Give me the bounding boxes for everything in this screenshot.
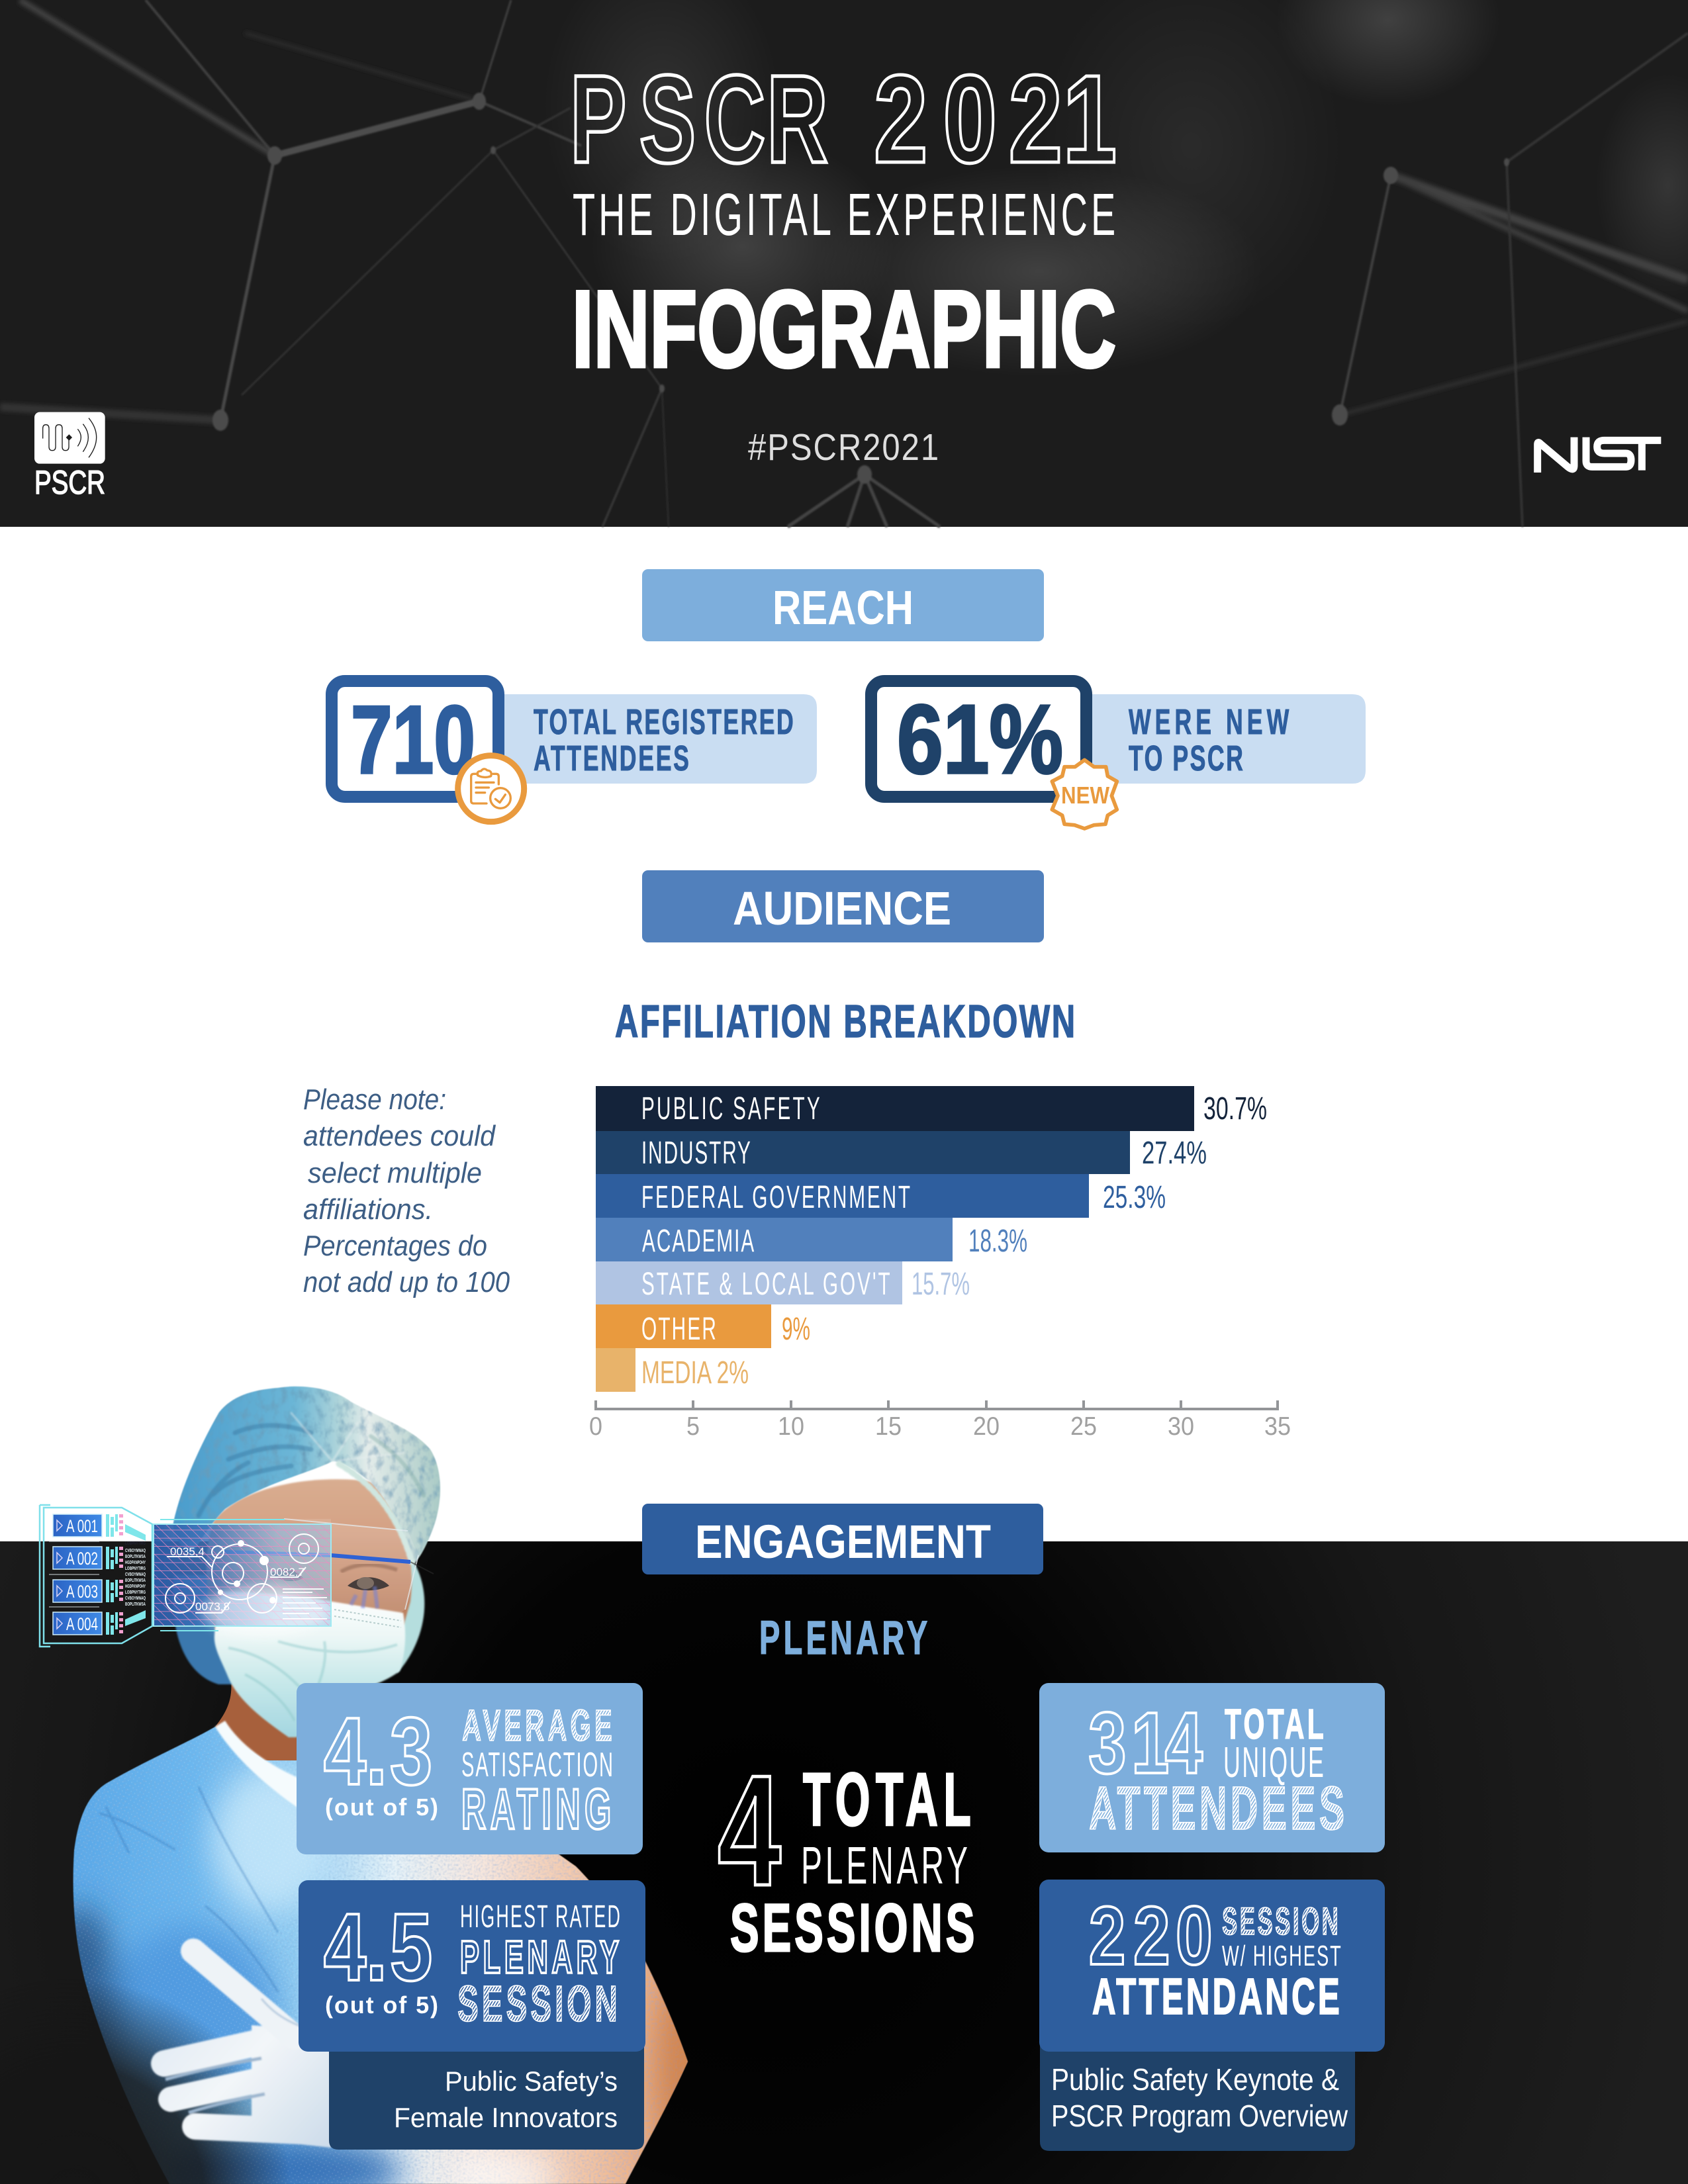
chart axis: 0 bbox=[589, 1412, 602, 1441]
title: PSCR 2021: 2021 bbox=[874, 49, 1117, 189]
eyes and face shield bbox=[223, 1519, 434, 1615]
gloved hand bbox=[164, 1951, 331, 2148]
title: infographic: INFOGRAPHIC bbox=[572, 268, 1116, 390]
bar: other bbox=[596, 1304, 810, 1348]
data panel: 0073,8 bbox=[195, 1600, 230, 1613]
bar: state and local government: STATE & LOCAL GOV'T bbox=[641, 1267, 890, 1302]
hashtag: #PSCR2021 bbox=[748, 427, 939, 469]
bar: media: MEDIA 2% bbox=[641, 1355, 749, 1390]
icon: clipboard with check bbox=[458, 756, 524, 822]
bar: public safety: PUBLIC SAFETY bbox=[641, 1091, 820, 1126]
button: A 003 bbox=[53, 1580, 123, 1602]
chart axis: 30 bbox=[1168, 1412, 1194, 1441]
chart axis bbox=[589, 1400, 1291, 1441]
stat: 4.5 highest rated plenary session: (out of 5) bbox=[325, 1991, 438, 2019]
stat: 314 total unique attendees bbox=[1039, 1683, 1385, 1852]
bar: other: OTHER bbox=[641, 1312, 716, 1347]
data panel: 0082,7 bbox=[270, 1566, 305, 1578]
bar: industry: INDUSTRY bbox=[641, 1136, 751, 1171]
stat: 4.3 average satisfaction rating: RATING bbox=[461, 1778, 611, 1841]
button: A 004 bbox=[53, 1612, 123, 1635]
panel: 61% were new to PSCR bbox=[871, 681, 1366, 829]
label: total registered attendees: ATTENDEES bbox=[534, 739, 689, 778]
button: A 001: A 001 bbox=[66, 1516, 98, 1536]
chart axis: 20 bbox=[973, 1412, 1000, 1441]
chart axis: 35 bbox=[1264, 1412, 1291, 1441]
heading: audience bbox=[642, 870, 1044, 942]
holographic display bbox=[40, 1505, 331, 1647]
neck and collar bbox=[215, 1680, 311, 1817]
button: A 002: A 002 bbox=[66, 1549, 98, 1569]
stat: 220 session with highest attendance: ATTENDANCE bbox=[1092, 1968, 1340, 2025]
stat: 4.5 highest rated plenary session: HIGHEST RATED bbox=[460, 1899, 620, 1934]
data panel bbox=[154, 1520, 331, 1637]
note: percentages disclaimer bbox=[303, 1083, 510, 1298]
chart axis: 25 bbox=[1070, 1412, 1097, 1441]
number box bbox=[332, 681, 498, 797]
stat: 4.3 average satisfaction rating: AVERAGE bbox=[462, 1700, 612, 1751]
label: total registered attendees: TOTAL REGISTERED bbox=[534, 702, 794, 742]
title: PSCR 2021 bbox=[570, 49, 1117, 189]
stat: 4.3 average satisfaction rating: SATISFACTION bbox=[461, 1745, 613, 1784]
side data list: CVBOYMNAQ bbox=[125, 1596, 146, 1601]
note: percentages disclaimer: not add up to 100 bbox=[303, 1266, 510, 1298]
note: percentages disclaimer: attendees could bbox=[303, 1120, 496, 1152]
surgical cap bbox=[173, 1387, 440, 1565]
logo: PSCR bbox=[34, 412, 105, 501]
cap back bbox=[173, 1542, 424, 1684]
chart axis: 5 bbox=[686, 1412, 700, 1441]
label: were new to PSCR: WERE NEW bbox=[1129, 702, 1289, 742]
subtitle: the digital experience: THE DIGITAL EXPERIENCE bbox=[573, 181, 1115, 248]
stat: 220 session with highest attendance: 220 bbox=[1089, 1889, 1213, 1982]
label: were new to PSCR bbox=[1129, 702, 1289, 778]
face bbox=[207, 1479, 412, 1638]
heading: engagement bbox=[642, 1504, 1043, 1574]
bar: public safety: 30.7% bbox=[1203, 1091, 1267, 1126]
button: A 003: A 003 bbox=[66, 1582, 98, 1602]
stat: 4 total plenary sessions: 4 bbox=[718, 1743, 781, 1919]
side data list: CVBOYMNAQ bbox=[125, 1572, 146, 1577]
panel: highest rated session name: Female Innovators bbox=[394, 2102, 618, 2133]
side data list: LOBPNYTIRG bbox=[125, 1590, 146, 1595]
heading: affiliation breakdown: AFFILIATION BREAKDOWN bbox=[615, 995, 1075, 1047]
panel: highest attendance session name bbox=[1040, 2045, 1355, 2151]
stat: 4 total plenary sessions: PLENARY bbox=[801, 1835, 968, 1895]
bar: other: 9% bbox=[782, 1312, 810, 1347]
stat: 314 total unique attendees: UNIQUE bbox=[1223, 1739, 1324, 1787]
panel: header banner bbox=[0, 0, 1688, 527]
bar: state and local government bbox=[596, 1261, 970, 1304]
label: were new to PSCR: TO PSCR bbox=[1129, 739, 1243, 778]
panel: highest attendance session name: Public Safety Keynote & bbox=[1051, 2062, 1339, 2097]
display frame bbox=[40, 1505, 152, 1647]
bar: state and local government: 15.7% bbox=[912, 1267, 970, 1302]
stat: 4.5 highest rated plenary session bbox=[299, 1880, 645, 2052]
number: 61%: 61% bbox=[897, 685, 1063, 794]
heading: reach: REACH bbox=[773, 582, 914, 635]
note: percentages disclaimer: Please note: bbox=[303, 1083, 446, 1116]
icon: new badge: NEW bbox=[1061, 782, 1109, 809]
side data list: BOPLITKWSA bbox=[125, 1555, 146, 1559]
stat: 220 session with highest attendance: W/ HIGHEST bbox=[1222, 1939, 1341, 1972]
bar: federal government: FEDERAL GOVERNMENT bbox=[641, 1180, 910, 1215]
stat: 220 session with highest attendance bbox=[1039, 1880, 1385, 2052]
side data list: CVBOYMNAQ bbox=[125, 1549, 146, 1553]
number: 710: 710 bbox=[351, 686, 475, 794]
title: PSCR 2021: PSCR bbox=[570, 50, 828, 189]
stat: 4 total plenary sessions bbox=[718, 1743, 974, 1966]
bar: industry: 27.4% bbox=[1142, 1136, 1207, 1171]
heading: plenary: PLENARY bbox=[759, 1612, 927, 1664]
label pill bbox=[496, 694, 817, 784]
stat: 4.3 average satisfaction rating: 4.3 bbox=[324, 1698, 432, 1805]
panel: dark engagement background bbox=[0, 1541, 1688, 2184]
note: percentages disclaimer: Percentages do bbox=[303, 1230, 487, 1262]
bar: academia: ACADEMIA bbox=[642, 1224, 755, 1259]
note: percentages disclaimer: affiliations. bbox=[303, 1193, 433, 1226]
stat: 4.5 highest rated plenary session: SESSION bbox=[457, 1975, 618, 2032]
stat: 4.5 highest rated plenary session: 4.5 bbox=[324, 1893, 432, 2001]
stat: 4.3 average satisfaction rating: (out of 5) bbox=[325, 1794, 438, 1821]
bar: industry bbox=[596, 1131, 1207, 1174]
side data list: LOBPNYTIRG bbox=[125, 1541, 146, 1546]
note: percentages disclaimer: select multiple bbox=[308, 1157, 482, 1189]
label: total registered attendees bbox=[534, 702, 794, 778]
stat: 220 session with highest attendance: SESSION bbox=[1222, 1901, 1338, 1943]
panel: 710 total registered attendees bbox=[332, 681, 817, 822]
surgical mask bbox=[214, 1592, 405, 1737]
bar: academia bbox=[596, 1218, 1027, 1261]
data panel: 0035,4 bbox=[170, 1545, 205, 1558]
gown bbox=[40, 1721, 708, 2184]
label pill bbox=[1086, 694, 1366, 784]
network background graphic bbox=[0, 0, 1688, 527]
icon: new badge bbox=[1052, 760, 1117, 829]
heading: engagement: ENGAGEMENT bbox=[695, 1516, 991, 1569]
side data list: HGDFKNPOHY bbox=[125, 1561, 146, 1565]
side data list: BOPLITKWSA bbox=[125, 1602, 146, 1607]
number box bbox=[871, 681, 1086, 797]
bar: media bbox=[596, 1348, 749, 1392]
heading: reach bbox=[642, 569, 1044, 641]
fade of gown into background bbox=[0, 1979, 291, 2184]
stat: 4 total plenary sessions: SESSIONS bbox=[730, 1890, 974, 1966]
stat: 314 total unique attendees: 314 bbox=[1088, 1695, 1203, 1792]
chart axis: 15 bbox=[875, 1412, 902, 1441]
bar: academia: 18.3% bbox=[968, 1224, 1027, 1259]
bar chart: affiliation breakdown bbox=[589, 1086, 1291, 1441]
bar: federal government bbox=[596, 1174, 1166, 1218]
side data list bbox=[49, 1524, 146, 1626]
stat: 4.3 average satisfaction rating bbox=[297, 1683, 643, 1854]
bar: public safety bbox=[596, 1086, 1267, 1131]
button: A 001 bbox=[53, 1514, 123, 1537]
panel: highest rated session name bbox=[329, 2045, 644, 2150]
panel: highest rated session name: Public Safety’s bbox=[445, 2066, 618, 2097]
panel: highest attendance session name: PSCR Program Overview bbox=[1051, 2099, 1348, 2133]
side data list: HGDFKNPOHY bbox=[125, 1584, 146, 1589]
side data list: BOPLITKWSA bbox=[125, 1578, 146, 1583]
logo: PSCR: PSCR bbox=[34, 464, 105, 501]
bar: federal government: 25.3% bbox=[1103, 1180, 1166, 1215]
stat: 314 total unique attendees: ATTENDEES bbox=[1089, 1774, 1344, 1843]
button: A 002 bbox=[53, 1547, 123, 1569]
stat: 4 total plenary sessions: TOTAL bbox=[803, 1758, 971, 1841]
button: A 004: A 004 bbox=[66, 1614, 98, 1634]
side data list: LOBPNYTIRG bbox=[125, 1567, 146, 1571]
illustration: health worker with holographic display bbox=[0, 1387, 708, 2184]
stat: 314 total unique attendees: TOTAL bbox=[1225, 1701, 1324, 1748]
logo: NIST bbox=[1538, 437, 1661, 473]
stat: 4.5 highest rated plenary session: PLENARY bbox=[460, 1931, 619, 1983]
heading: audience: AUDIENCE bbox=[733, 883, 951, 935]
chart axis: 10 bbox=[778, 1412, 804, 1441]
